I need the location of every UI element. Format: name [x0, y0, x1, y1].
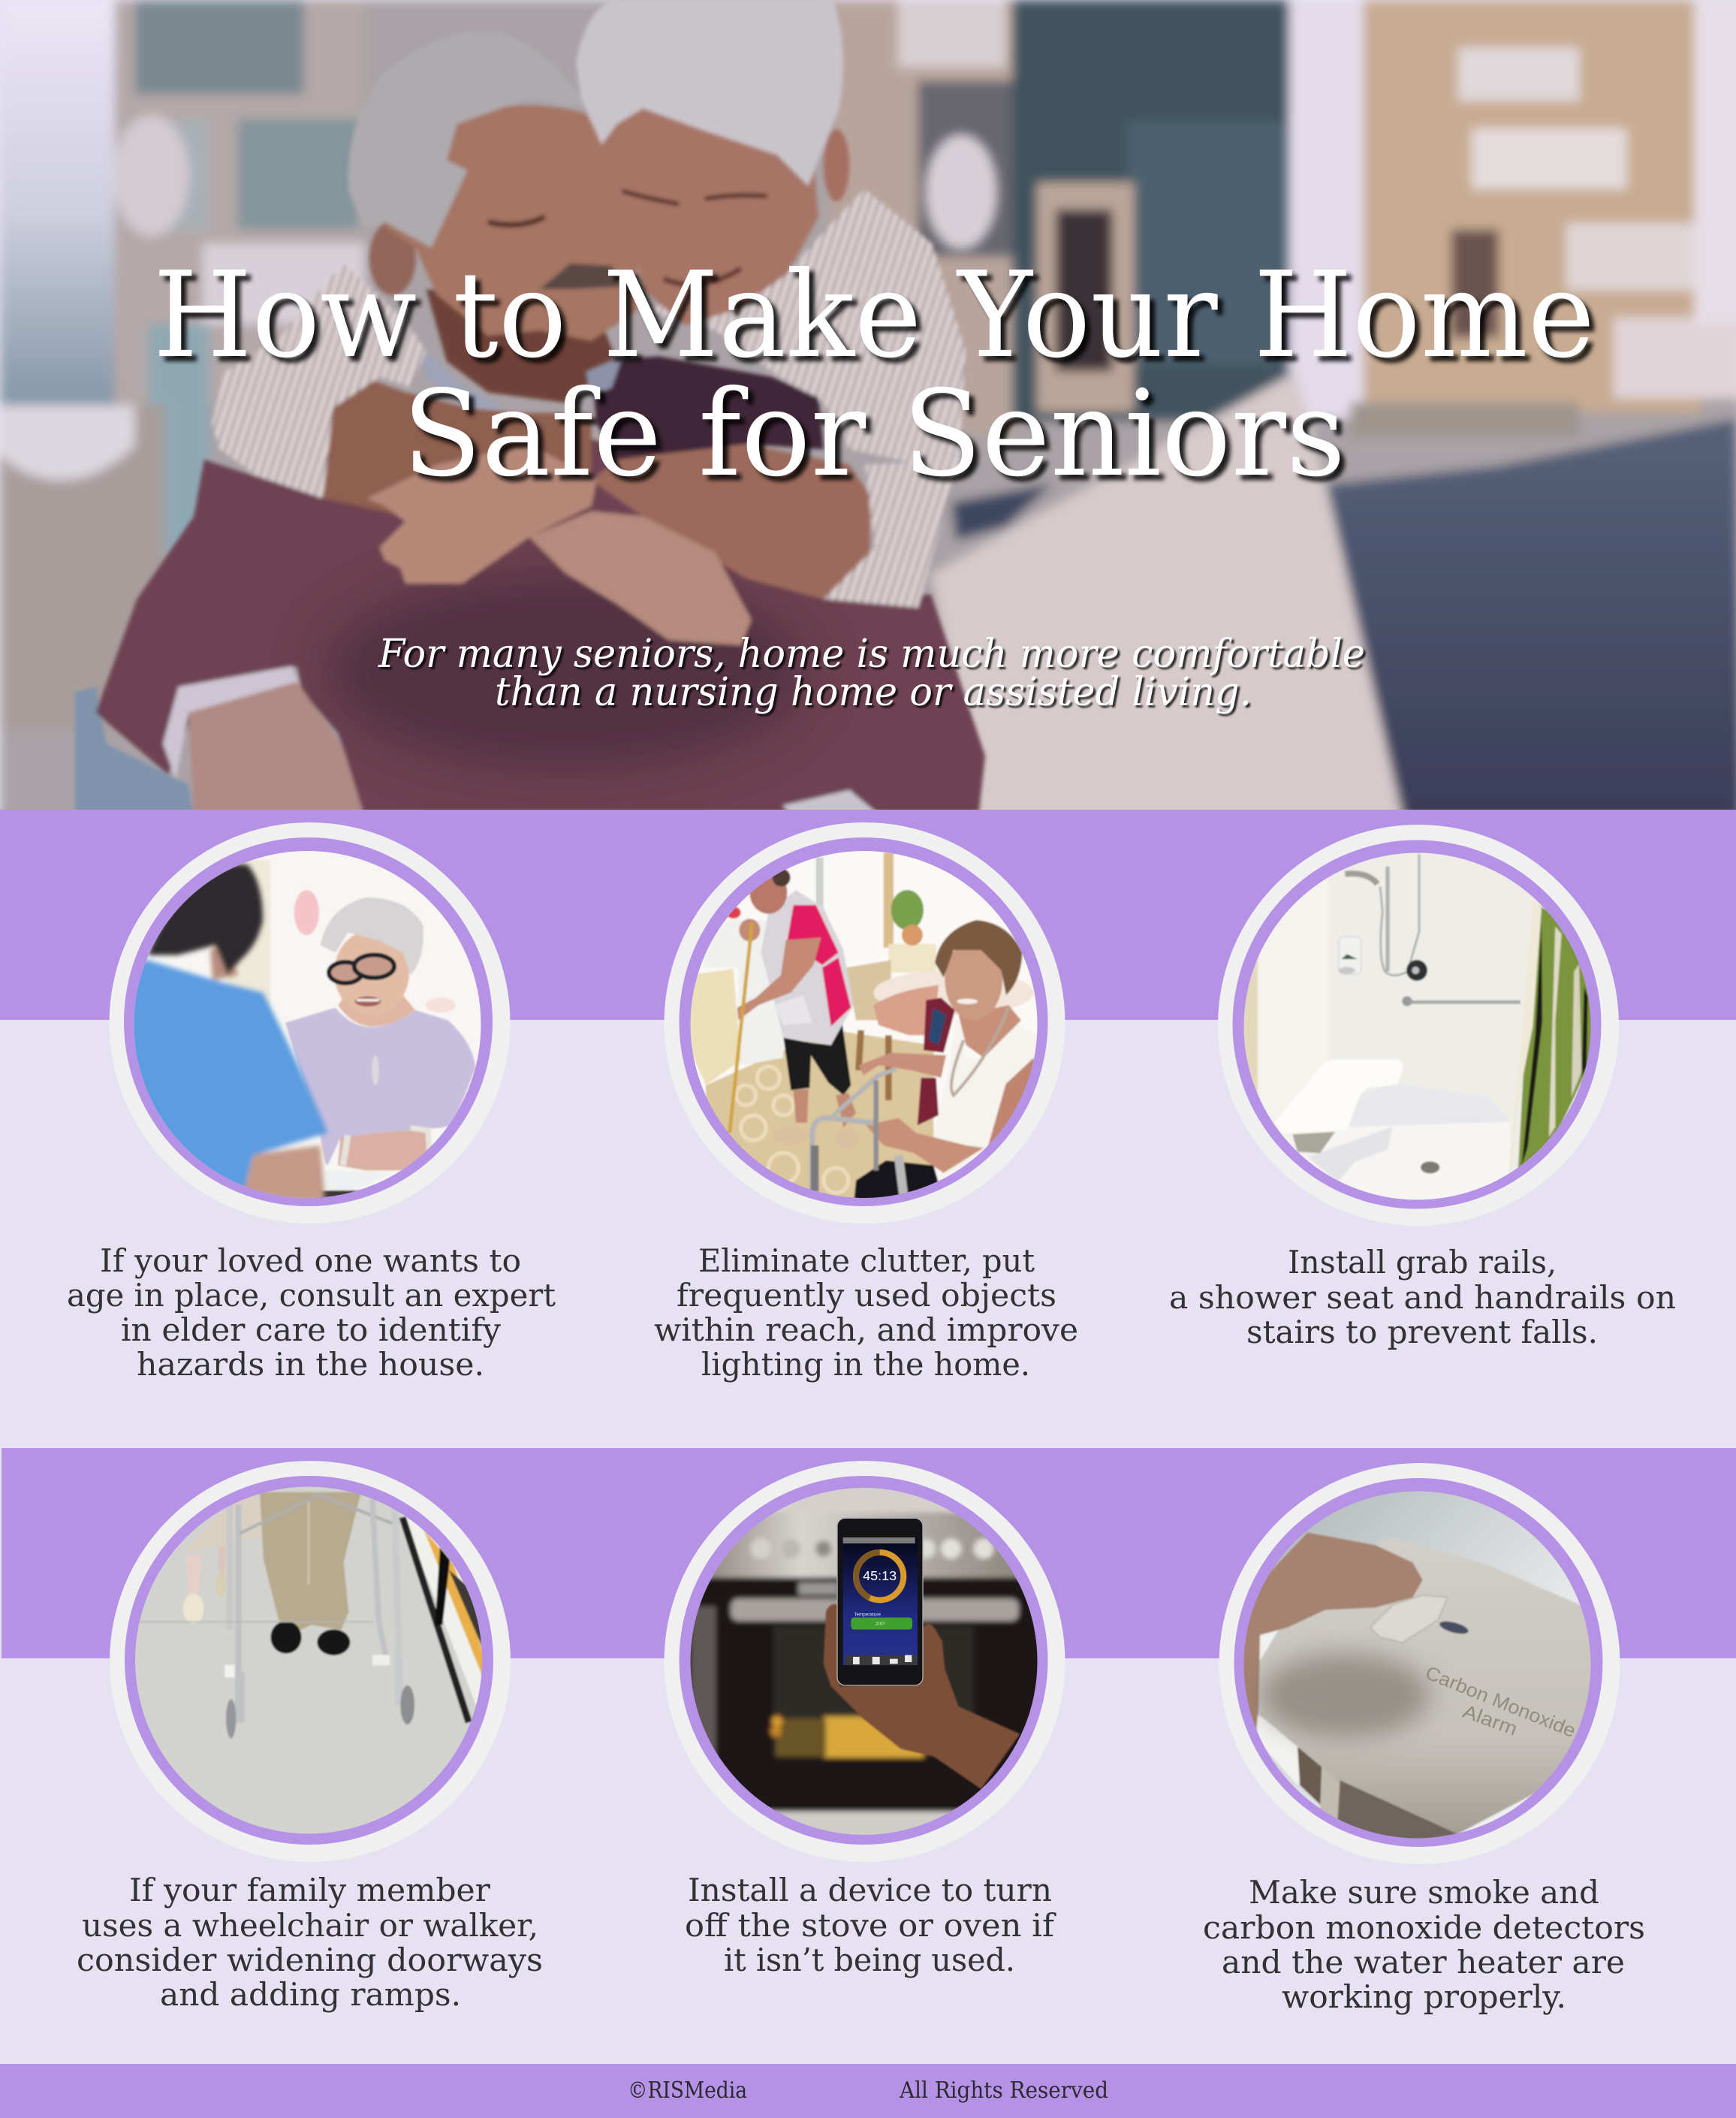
- panel: wheelchair or walker: [77, 1461, 543, 2013]
- caption 2: Eliminate clutter, put: [698, 1242, 1035, 1279]
- title: Safe for Seniors: [402, 365, 1346, 503]
- hero photo: senior couple embracing on sofa: [0, 0, 1736, 824]
- caption 3: Install grab rails,: [1288, 1244, 1557, 1281]
- photo frame 6: [1219, 1463, 1620, 1864]
- photo: accessible shower with seat and rails: [1237, 846, 1598, 1207]
- photo: finger pressing carbon monoxide alarm: [1237, 1485, 1598, 1845]
- photo frame 3: [1218, 825, 1619, 1226]
- footer: copyright: ©RISMedia: [628, 2077, 747, 2104]
- caption 2: within reach, and improve: [654, 1311, 1078, 1348]
- caption 6: Make sure smoke and: [1249, 1874, 1599, 1911]
- caption 3: a shower seat and handrails on: [1169, 1279, 1676, 1316]
- caption 1: hazards in the house.: [137, 1346, 484, 1383]
- device: phone with oven app: Temperature: [854, 1612, 881, 1617]
- footer band: [0, 2064, 1736, 2118]
- caption 3: [1169, 1244, 1676, 1350]
- footer: rights: All Rights Reserved: [899, 2077, 1108, 2104]
- caption 4: and adding ramps.: [160, 1976, 461, 2013]
- caption 4: [77, 1872, 543, 2013]
- caption 1: If your loved one wants to: [100, 1242, 521, 1279]
- hero background: living room with shelves and sofa: [0, 0, 1736, 824]
- caption 5: [685, 1872, 1057, 1978]
- caption 6: [1203, 1874, 1645, 2015]
- subtitle: [378, 632, 1365, 715]
- photo: carer sweeping with senior woman and walker: [683, 845, 1044, 1205]
- photo frame 5: [664, 1461, 1065, 1862]
- caption 4: uses a wheelchair or walker,: [82, 1907, 538, 1944]
- device: phone with oven app: [837, 1518, 923, 1685]
- caption 6: carbon monoxide detectors: [1203, 1909, 1645, 1946]
- hero figures: man in maroon sweater and woman in striped top: [75, 0, 985, 816]
- photo: senior using walker on ramp: [128, 1480, 489, 1840]
- photo frame 1: [110, 822, 511, 1223]
- title: [153, 246, 1595, 503]
- caption 6: working properly.: [1282, 1978, 1566, 2015]
- purple band row 2: [2, 1448, 1736, 1658]
- caption 3: stairs to prevent falls.: [1246, 1314, 1598, 1350]
- panel: smoke and CO detectors: [1203, 1463, 1645, 2015]
- device: phone with oven app: 45:13: [863, 1568, 897, 1583]
- printed alarm label: Carbon Monoxide: [1422, 1662, 1578, 1742]
- caption 1: age in place, consult an expert: [67, 1277, 556, 1314]
- device: phone with oven app: 200°: [876, 1621, 886, 1627]
- photo: nurse talking with senior woman: [122, 845, 488, 1205]
- panel: stove shut-off device: [664, 1461, 1065, 1978]
- title: How to Make Your Home: [153, 246, 1595, 385]
- caption 6: and the water heater are: [1222, 1944, 1625, 1981]
- photo frame 2: [664, 822, 1065, 1223]
- oven background: [683, 1481, 1044, 1842]
- photo: phone controlling oven: [683, 1481, 1044, 1842]
- printed alarm label: Alarm: [1460, 1701, 1520, 1740]
- soft shadow on alarm casing: [1260, 1652, 1430, 1738]
- caption 4: consider widening doorways: [77, 1942, 543, 1978]
- panel: eliminate clutter: [654, 822, 1078, 1383]
- panel: grab rails: [1169, 825, 1676, 1350]
- panel: consult an expert: [67, 822, 556, 1383]
- hand holding phone: [824, 1604, 1020, 1789]
- caption 5: it isn’t being used.: [724, 1942, 1015, 1978]
- nurse seen from behind: [122, 864, 328, 1205]
- photo frame 4: [110, 1461, 511, 1862]
- caption 2: frequently used objects: [677, 1277, 1056, 1314]
- caption 2: lighting in the home.: [701, 1346, 1030, 1383]
- caption 2: [654, 1242, 1078, 1383]
- subtitle: than a nursing home or assisted living.: [495, 670, 1252, 715]
- purple band row 1: [0, 810, 1736, 1020]
- caption 4: If your family member: [129, 1872, 491, 1908]
- caption 1: in elder care to identify: [121, 1311, 501, 1348]
- caption 1: [67, 1242, 556, 1383]
- caption 5: off the stove or oven if: [685, 1907, 1057, 1944]
- caption 5: Install a device to turn: [688, 1872, 1052, 1908]
- subtitle: For many seniors, home is much more comfortable: [378, 632, 1365, 677]
